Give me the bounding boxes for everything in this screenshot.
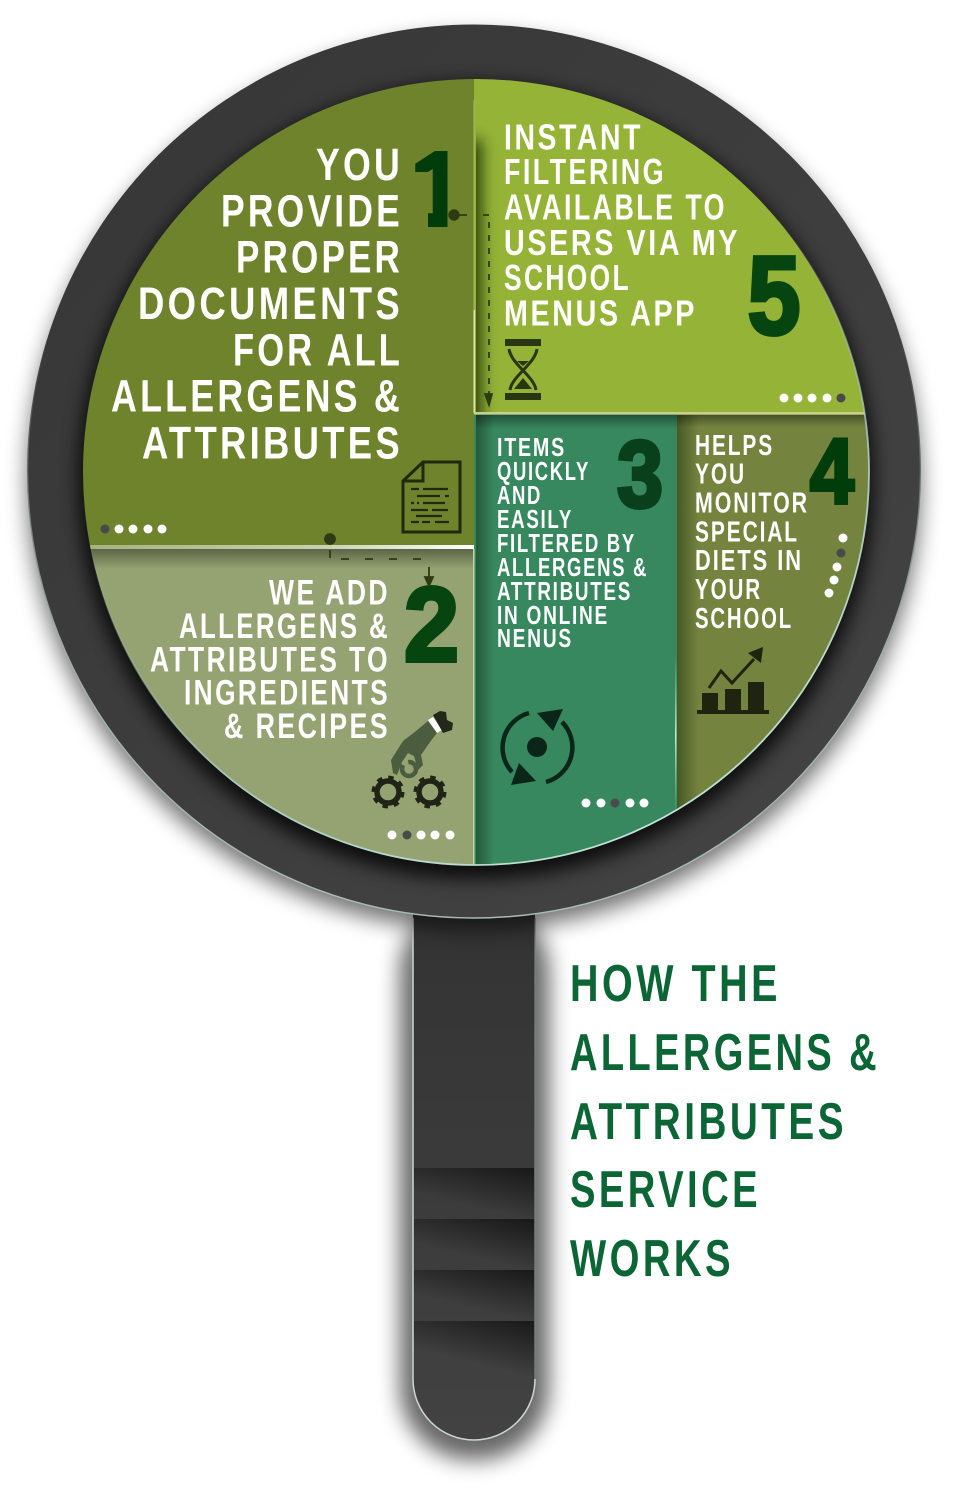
panel 2 text: INGREDIENTS [184, 674, 390, 712]
icon: document [403, 462, 460, 532]
panel 2 text: ALLERGENS & [179, 607, 390, 646]
panel 5 text: AVAILABLE TO [504, 186, 727, 228]
panel 3 text: IN ONLINE [497, 600, 609, 630]
lens with five panels [80, 75, 877, 873]
panel 4 text: SCHOOL [695, 603, 793, 635]
panel 1 text: DOCUMENTS [138, 278, 403, 329]
panel 1 text: PROPER [236, 232, 403, 282]
connector arrow from step 1 to step 2 [325, 534, 433, 586]
panel 4 text: YOU [695, 458, 746, 490]
panel 5 text [504, 116, 740, 334]
gears [374, 778, 444, 806]
panel 4 text: HELPS [695, 430, 774, 462]
panel 3 text: ITEMS [497, 432, 566, 462]
panel 2 text: ATTRIBUTES TO [150, 640, 390, 680]
panel 1 text: ALLERGENS & [111, 370, 403, 422]
panel 4 text [695, 430, 809, 635]
title: HOW THE [570, 955, 781, 1013]
panel 3 text: AND [497, 480, 542, 510]
cuff [428, 717, 442, 733]
icon: rising bar chart [697, 647, 769, 714]
number 5: 5 [748, 234, 800, 358]
panel 4 text: SPECIAL [695, 516, 799, 548]
panel 3 text: FILTERED BY [497, 528, 636, 558]
hand [391, 721, 437, 775]
icon: hand with gears [374, 711, 453, 806]
title: ATTRIBUTES [570, 1093, 847, 1151]
panel 1 background [80, 75, 474, 547]
panel 1 text: ATTRIBUTES [142, 418, 403, 468]
panel 1 text: FOR ALL [233, 324, 403, 376]
pagination dots: panel 2 [388, 830, 454, 840]
pagination dots: panel 1 [100, 524, 166, 534]
panel 5 text: SCHOOL [504, 257, 631, 298]
panel 2 text [150, 574, 390, 746]
panel 1 text: PROVIDE [221, 186, 403, 236]
panel 5 background [474, 79, 864, 412]
panel 1 text: YOU [316, 139, 403, 190]
panel 4 text: YOUR [695, 574, 762, 606]
panel 3 text: NENUS [497, 623, 573, 653]
title: SERVICE [570, 1161, 761, 1219]
panel 5 text: USERS VIA MY [504, 222, 740, 263]
panel 5 text: FILTERING [504, 151, 666, 192]
panel 3 text: ATTRIBUTES [497, 576, 632, 606]
panel 1 text [111, 139, 403, 468]
panel 3 text [497, 432, 648, 653]
connector arrow from step 1 to step 5 [449, 210, 492, 405]
number 3: 3 [617, 422, 663, 528]
pagination dots: panel 4 [824, 534, 848, 598]
panel 2 text: & RECIPES [224, 707, 390, 746]
pagination dots: panel 3 [582, 798, 648, 808]
number 2: 2 [404, 566, 459, 684]
panel 3 text: EASILY [497, 504, 573, 534]
panel 3 text: ALLERGENS & [497, 552, 648, 582]
pagination dots: panel 5 [780, 394, 846, 402]
panel 4 text: DIETS IN [695, 545, 803, 577]
icon: hourglass [505, 339, 541, 400]
panel 2 text: WE ADD [269, 574, 390, 612]
title: WORKS [570, 1230, 734, 1288]
panel 5 text: INSTANT [504, 116, 643, 158]
number 1: 1 [410, 131, 469, 249]
title [570, 955, 880, 1288]
magnifying glass handle [400, 900, 549, 1460]
panel 4 background [675, 414, 868, 809]
panel 5 text: MENUS APP [504, 292, 697, 334]
number 4: 4 [810, 421, 854, 523]
icon: refresh cycle [503, 709, 572, 785]
panel 3 background [474, 413, 677, 873]
magnifying glass ring [27, 24, 921, 930]
panel 3 text: QUICKLY [497, 456, 590, 486]
panel 2 background [80, 547, 474, 872]
panel 4 text: MONITOR [695, 488, 809, 520]
